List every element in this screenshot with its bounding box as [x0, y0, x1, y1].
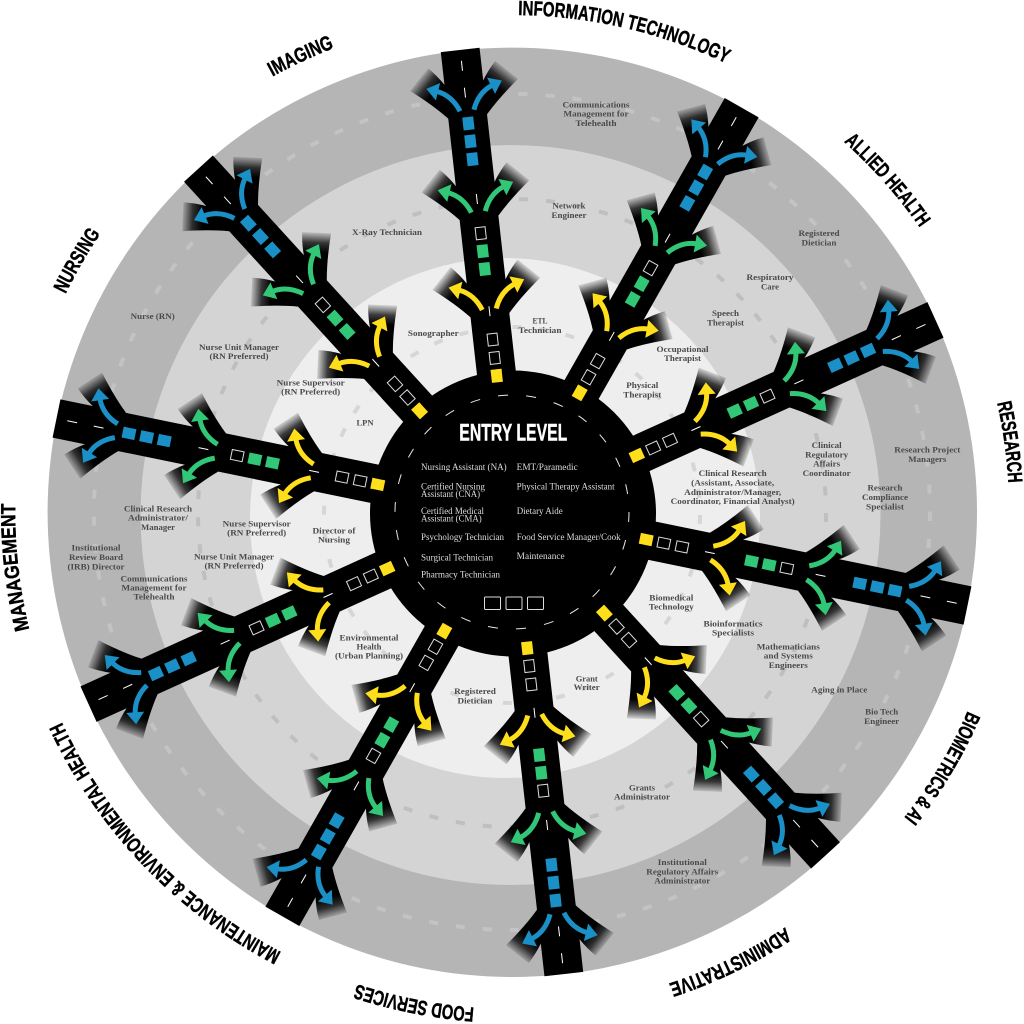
- yellow cars on roundabout: [370, 369, 654, 655]
- label: bio tech engineer: Bio Tech: [865, 707, 898, 717]
- label: aging in place: Aging in Place: [811, 685, 868, 695]
- green cars: [744, 554, 794, 575]
- label: nurse unit manager (lower): (RN Preferred): [204, 561, 264, 571]
- entry level jobs: left column: Pharmacy Technician: [421, 570, 500, 580]
- entry level jobs: left column: Certified Medical: [421, 506, 484, 516]
- label: communications management (left): [120, 573, 188, 602]
- label: mathematicians and systems engineers: Mathematicians: [757, 641, 821, 651]
- label: bioinformatics specialists: Bioinformatics: [704, 618, 763, 628]
- label: institutional regulatory affairs administrator: Institutional: [658, 857, 707, 867]
- blue fork and arrows: [661, 94, 782, 193]
- road surface: [504, 609, 583, 976]
- label: institutional regulatory affairs administrator: Regulatory Affairs: [646, 866, 719, 876]
- green cars: [475, 227, 491, 276]
- road: research: [581, 271, 958, 520]
- label: grant writer: Writer: [574, 682, 600, 692]
- yellow cars: [387, 376, 428, 419]
- label: IRB director: (IRB) Director: [68, 561, 125, 571]
- label: speech therapist: Speech: [712, 308, 739, 318]
- label: clinical research administrator: [124, 503, 192, 532]
- green cars: [726, 389, 775, 419]
- label: nurse supervisor (upper): (RN Preferred): [281, 387, 340, 397]
- label: institutional regulatory affairs administrator: [646, 857, 719, 885]
- road: imaging: [158, 132, 485, 475]
- label: physical therapist: Physical: [626, 380, 659, 390]
- blue cars: [462, 116, 479, 166]
- label: environmental health: (Urban Planning): [335, 651, 403, 661]
- label: IRB director: Review Board: [69, 552, 123, 562]
- label: nurse supervisor (upper): Nurse Supervisor: [277, 378, 345, 388]
- road: biometrics and AI: [599, 479, 978, 659]
- blue fork and arrows: [740, 769, 856, 881]
- label: nurse supervisor (lower): (RN Preferred): [227, 528, 286, 538]
- label: respiratory care: Respiratory: [746, 272, 794, 282]
- green cars: [625, 260, 658, 308]
- yellow cars: [335, 471, 385, 491]
- label: clinical research: Administrator/Manager,: [684, 487, 781, 497]
- green cars: [366, 716, 399, 764]
- label: biomedical technology: [649, 592, 695, 612]
- road: maintenance and environmental health: [235, 572, 510, 943]
- entry level jobs: left column: Certified Nursing: [421, 481, 485, 491]
- label: communications management (left): Management for: [122, 583, 187, 593]
- label: respiratory care: Care: [761, 282, 779, 292]
- green cars: [249, 605, 298, 635]
- label: nurse unit manager (upper): Nurse Unit Manager: [199, 342, 279, 352]
- heading: entry level: ENTRY LEVEL: [459, 420, 567, 447]
- label: bioinformatics specialists: [704, 618, 763, 637]
- blue cars: [122, 427, 172, 447]
- blue cars: [545, 858, 562, 908]
- label: communications management (left): Communications: [120, 573, 188, 583]
- label: clinical regulatory affairs coordinator: [803, 440, 851, 478]
- label: nurse unit manager (upper): [199, 342, 279, 361]
- label: clinical regulatory affairs coordinator: Coordinator: [803, 468, 851, 478]
- label: registered dietician (allied health): Registered: [798, 228, 840, 238]
- label: director of nursing: Nursing: [318, 535, 351, 545]
- label: director of nursing: [312, 525, 356, 545]
- road: management: [66, 504, 443, 753]
- blue fork and arrows: [852, 277, 944, 397]
- green cars: [315, 297, 356, 340]
- label: biomedical technology: Biomedical: [649, 592, 694, 602]
- green fork and arrows: [491, 800, 605, 864]
- label: institutional regulatory affairs administrator: Administrator: [654, 875, 711, 885]
- entry level jobs: left column: [421, 462, 507, 580]
- label: clinical research administrator: Administrator/: [128, 513, 189, 523]
- blue fork and arrows: [408, 59, 522, 123]
- yellow fork and arrows: [262, 544, 354, 665]
- entry level jobs: right column: EMT/Paramedic: [517, 462, 578, 472]
- label: registered dietician (allied health): [798, 228, 840, 248]
- label: bio tech engineer: [864, 707, 899, 726]
- green fork and arrows: [672, 694, 787, 806]
- entry level jobs: right column: Physical Therapy Assistant: [517, 481, 615, 491]
- label: nurse unit manager (lower): Nurse Unit Manager: [194, 552, 274, 562]
- label: clinical research administrator: Manager: [141, 522, 175, 532]
- label: mathematicians and systems engineers: [757, 641, 821, 670]
- label: nurse supervisor (upper): [277, 378, 345, 397]
- road surface: [441, 48, 520, 415]
- yellow fork and arrows: [341, 657, 461, 756]
- label: grants administrator: Administrator: [614, 792, 670, 802]
- label: mathematicians and systems engineers: Engineers: [769, 660, 809, 670]
- yellow cars: [629, 433, 678, 463]
- label: grants administrator: [614, 783, 670, 802]
- yellow fork and arrows: [670, 359, 762, 480]
- label: environmental health: Environmental: [340, 632, 399, 642]
- green cars: [533, 748, 549, 797]
- yellow fork and arrows: [563, 268, 683, 367]
- label: clinical regulatory affairs coordinator: Clinical: [812, 440, 842, 450]
- label: network engineer: Network: [552, 200, 586, 210]
- label: research compliance specialist: Research: [868, 483, 903, 493]
- label: research project managers: Research Project: [894, 444, 960, 454]
- label: communications management (top): Telehealth: [576, 118, 617, 128]
- green fork and arrows: [172, 585, 265, 705]
- label: mathematicians and systems engineers: and Systems: [764, 651, 814, 661]
- label: bioinformatics specialists: Specialists: [712, 627, 755, 637]
- blue fork and arrows: [242, 831, 363, 930]
- blue cars: [679, 164, 713, 212]
- label: research compliance specialist: [862, 483, 908, 512]
- green cars: [668, 684, 709, 727]
- label: communications management (top): Management for: [564, 109, 629, 119]
- entry level jobs: right column: Food Service Manager/Cook: [517, 532, 621, 542]
- blue cars: [240, 215, 281, 258]
- label: research compliance specialist: Specialist: [866, 502, 904, 512]
- label: registered dietician (food services): Registered: [454, 686, 496, 696]
- road surface: [53, 399, 418, 511]
- label: communications management (left): Telehealth: [134, 592, 175, 602]
- yellow cars: [521, 641, 537, 691]
- label: physical therapist: [623, 380, 661, 400]
- road: food services: [469, 605, 618, 980]
- green fork and arrows: [293, 743, 413, 842]
- blue fork and arrows: [60, 368, 133, 485]
- road surface: [606, 513, 971, 625]
- yellow fork and arrows: [695, 499, 768, 615]
- heading: imaging: IMAGING: [266, 36, 333, 76]
- label: communications management (top): [562, 100, 630, 128]
- entry level jobs: left column: Assistant (CNA): [421, 489, 480, 499]
- label: IRB director: [68, 543, 125, 571]
- yellow fork and arrows: [430, 257, 544, 321]
- label: occupational therapist: Occupational: [656, 344, 709, 354]
- entry level jobs: right column: Maintenance: [517, 551, 565, 561]
- road surface: [565, 573, 840, 869]
- heading: administrative: ADMINISTRATIVE: [669, 927, 790, 997]
- label: nurse supervisor (lower): Nurse Supervisor: [223, 518, 291, 528]
- road surface: [265, 589, 480, 926]
- blue cars: [743, 766, 784, 809]
- road surface: [595, 302, 944, 488]
- label: registered dietician (food services): Dietician: [458, 695, 493, 705]
- entry level jobs: right column: [517, 462, 621, 561]
- label: ETL technician: Technician: [518, 325, 562, 335]
- yellow cars: [572, 353, 605, 401]
- label: biomedical technology: Technology: [649, 602, 695, 612]
- yellow cars: [596, 605, 637, 648]
- entry level jobs: left column: Psychology Technician: [421, 532, 504, 542]
- label: clinical research administrator: Clinical Research: [124, 503, 192, 513]
- heading: nursing: NURSING: [53, 228, 99, 294]
- label: research compliance specialist: Compliance: [862, 492, 908, 502]
- label: nurse RN: Nurse (RN): [131, 311, 175, 321]
- label: occupational therapist: [656, 344, 709, 363]
- label: bio tech engineer: Engineer: [864, 716, 899, 726]
- label: clinical research: [671, 468, 795, 506]
- label: environmental health: [335, 632, 403, 661]
- green fork and arrows: [419, 160, 533, 224]
- label: research project managers: Managers: [908, 454, 947, 464]
- label: environmental health: Health: [356, 641, 382, 651]
- label: clinical research: (Assistant, Associate,: [691, 478, 774, 488]
- road: allied health: [514, 81, 789, 452]
- green cars: [230, 449, 280, 470]
- road: information technology: [406, 44, 555, 419]
- label: respiratory care: [746, 272, 794, 292]
- green fork and arrows: [160, 389, 233, 506]
- label: physical therapist: Therapist: [623, 390, 661, 400]
- entry level jobs: left column: Assistant (CMA): [421, 514, 482, 524]
- job labels: [68, 100, 960, 885]
- blue cars: [148, 651, 197, 681]
- road: nursing: [46, 365, 425, 545]
- road surface: [544, 98, 759, 435]
- blue fork and arrows: [80, 627, 172, 747]
- heading: biometrics and AI: BIOMETRICS & AI: [904, 712, 980, 826]
- label: x-ray technician: X-Ray Technician: [352, 227, 422, 237]
- label: clinical research: Clinical Research: [699, 468, 767, 478]
- label: clinical research: Coordinator, Financial Analyst): [671, 496, 795, 506]
- yellow cars: [346, 561, 395, 591]
- label: registered dietician (food services): [454, 686, 496, 705]
- label: speech therapist: [707, 308, 744, 328]
- label: communications management (top): Communications: [562, 100, 630, 110]
- yellow cars: [419, 623, 452, 671]
- label: nurse unit manager (upper): (RN Preferred): [210, 351, 269, 361]
- blue cars: [311, 812, 345, 860]
- label: nurse unit manager (lower): [194, 552, 274, 571]
- central roundabout: [370, 370, 656, 656]
- road surface: [184, 155, 459, 451]
- label: registered dietician (allied health): Dietician: [802, 238, 837, 248]
- road: administrative: [539, 549, 866, 892]
- label: sonographer: Sonographer: [408, 328, 459, 338]
- label: research project managers: [894, 444, 960, 464]
- label: speech therapist: Therapist: [707, 318, 744, 328]
- yellow fork and arrows: [605, 622, 721, 733]
- inner ring: [250, 258, 760, 778]
- blue fork and arrows: [168, 143, 284, 255]
- label: grants administrator: Grants: [629, 783, 656, 793]
- green fork and arrows: [237, 218, 352, 330]
- label: ETL technician: ETL: [532, 316, 548, 326]
- label: ETL technician: [518, 316, 562, 335]
- label: nurse supervisor (lower): [223, 518, 291, 538]
- green fork and arrows: [791, 518, 864, 635]
- road surface: [80, 536, 429, 722]
- label: network engineer: [552, 200, 587, 220]
- blue cars: [852, 577, 902, 597]
- label: clinical regulatory affairs coordinator: Affairs: [813, 459, 841, 469]
- entry level jobs: left column: Nursing Assistant (NA): [421, 462, 507, 472]
- label: network engineer: Engineer: [552, 210, 587, 220]
- green fork and arrows: [611, 182, 731, 281]
- label: grant writer: Grant: [576, 673, 598, 683]
- green fork and arrows: [759, 319, 852, 439]
- blue fork and arrows: [502, 901, 616, 965]
- label: director of nursing: Director of: [312, 525, 356, 535]
- middle ring: [140, 145, 880, 885]
- entry level jobs: left column: Surgical Technician: [421, 553, 493, 563]
- yellow fork and arrows: [303, 291, 419, 402]
- label: LPN: LPN: [356, 417, 374, 427]
- yellow fork and arrows: [480, 703, 594, 767]
- label: clinical regulatory affairs coordinator: Regulatory: [805, 449, 849, 459]
- blue fork and arrows: [891, 539, 964, 656]
- heading: maintenance and environmental health: MAINTENANCE & ENVIRONMENTAL HEALTH: [49, 722, 281, 964]
- yellow cars: [487, 333, 503, 383]
- entry level jobs: right column: Dietary Aide: [517, 506, 563, 516]
- yellow cars: [639, 533, 689, 553]
- three empty car outlines: [484, 597, 544, 610]
- label: IRB director: Institutional: [72, 543, 121, 553]
- heading: allied health: ALLIED HEALTH: [844, 134, 932, 228]
- blue cars: [827, 343, 876, 373]
- yellow fork and arrows: [256, 409, 329, 525]
- label: grant writer: [574, 673, 600, 692]
- label: occupational therapist: Therapist: [664, 353, 701, 363]
